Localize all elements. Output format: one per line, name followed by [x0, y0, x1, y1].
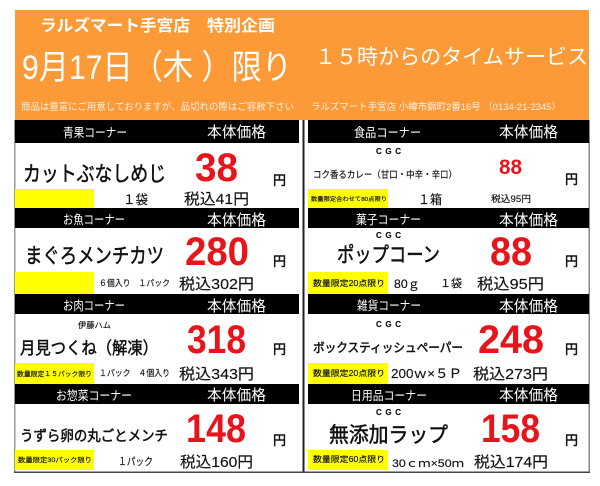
panel: 日用品コーナー: 158: [481, 407, 540, 451]
panel: 雑貨コーナー: 248: [478, 318, 544, 362]
panel: お魚コーナー: まぐろメンチカツ: [25, 245, 164, 268]
panel: お魚コーナー: ６個入り １パック: [99, 278, 170, 288]
panel: 日用品コーナー: 日用品コーナー: [351, 389, 427, 403]
panel: お魚コーナー: 税込302円: [179, 276, 254, 293]
panel: 雑貨コーナー: 数量限定20点限り: [313, 368, 385, 378]
panel: 青果コーナー: 青果コーナー: [63, 126, 127, 140]
panel: 食品コーナー: 円: [565, 172, 578, 187]
panel: 青果コーナー: 円: [273, 173, 286, 188]
panel: 日用品コーナー: 数量限定60点限り: [313, 454, 385, 464]
panel: 食品コーナー: 数量限定合わせて80点限り: [311, 195, 387, 203]
panel: 菓子コーナー: 菓子コーナー: [356, 213, 421, 227]
panel: 菓子コーナー: １袋: [440, 276, 462, 290]
panel: 青果コーナー: 税込41円: [184, 191, 249, 208]
panel: お肉コーナー: 税込343円: [179, 366, 254, 383]
panel: 菓子コーナー: ポップコーン: [337, 244, 440, 267]
panel: 日用品コーナー: 円: [565, 433, 578, 448]
panel: お魚コーナー: [15, 208, 299, 294]
panel: 食品コーナー: [308, 120, 589, 208]
panel: 青果コーナー: 本体価格: [207, 124, 266, 141]
panel: 青果コーナー: [15, 120, 299, 208]
panel: 雑貨コーナー: ボックスティッシュペーパー: [313, 341, 463, 355]
panel: 菓子コーナー: 88: [490, 230, 532, 274]
panel: お肉コーナー: [15, 294, 299, 384]
panel: 日用品コーナー: 30ｃｍ×50ｍ: [392, 458, 464, 470]
store title: ラルズマート手宮店: [40, 16, 190, 35]
panel: 雑貨コーナー: 円: [565, 342, 578, 357]
panel: 雑貨コーナー: 本体価格: [499, 298, 558, 315]
panel: 日用品コーナー: 本体価格: [499, 387, 558, 404]
panel: お惣菜コーナー: 円: [273, 433, 286, 448]
panel: お魚コーナー: お魚コーナー: [63, 213, 125, 227]
panel: お肉コーナー: 伊藤ハム: [78, 320, 111, 330]
panel: 菓子コーナー: 数量限定20点限り: [313, 278, 385, 288]
store title: [40, 16, 275, 35]
panel: 食品コーナー: 食品コーナー: [354, 126, 421, 140]
panel: 食品コーナー: １箱: [418, 192, 442, 207]
panel: 食品コーナー: 本体価格: [499, 124, 558, 141]
panel: 日用品コーナー: CGC: [376, 408, 401, 417]
panel: 青果コーナー: 38: [195, 146, 238, 190]
panel: 食品コーナー: 88: [499, 156, 522, 179]
panel: お惣菜コーナー: 税込160円: [180, 454, 253, 471]
panel: 菓子コーナー: 80ｇ: [394, 277, 420, 291]
panel: 菓子コーナー: 本体価格: [499, 212, 558, 229]
table frame: [14, 120, 590, 473]
panel: 食品コーナー: コク香るカレー（甘口・中辛・辛口）: [313, 169, 457, 181]
panel: お惣菜コーナー: 本体価格: [207, 387, 266, 404]
panel: 日用品コーナー: 無添加ラップ: [329, 424, 448, 447]
panel: 雑貨コーナー: 税込273円: [473, 366, 548, 383]
panel: お惣菜コーナー: 数量限定30パック限り: [18, 455, 92, 464]
panel: お魚コーナー: 280: [185, 230, 249, 274]
panel: お惣菜コーナー: お惣菜コーナー: [56, 388, 132, 403]
panel: お惣菜コーナー: [15, 384, 299, 471]
panel: 雑貨コーナー: 雑貨コーナー: [357, 298, 421, 313]
panel: 菓子コーナー: [308, 208, 589, 294]
panel: 雑貨コーナー: [308, 294, 589, 384]
panel: 日用品コーナー: 税込174円: [474, 454, 548, 471]
panel: 青果コーナー: １袋: [123, 193, 148, 207]
panel: お惣菜コーナー: 148: [186, 407, 246, 451]
time service heading: １５時からのタイムサービス: [315, 46, 588, 69]
panel: 雑貨コーナー: 200ｗ×５Ｐ: [391, 366, 462, 381]
header banner: [15, 10, 589, 120]
panel: 雑貨コーナー: CGC: [376, 320, 401, 329]
date heading: 9月17日（木 ）限り: [22, 49, 292, 87]
panel: お肉コーナー: １パック ４個入り: [99, 368, 170, 378]
panel: お肉コーナー: 本体価格: [207, 298, 266, 315]
panel: お惣菜コーナー: １パック: [118, 456, 153, 468]
store address: ラルズマート手宮店 小樽市錦町2番16号 （0134-21-2345）: [311, 101, 561, 113]
panel: 菓子コーナー: 円: [565, 254, 578, 269]
panel: お魚コーナー: 円: [273, 254, 286, 269]
panel: お肉コーナー: お肉コーナー: [63, 299, 125, 313]
panel: お肉コーナー: 318: [187, 318, 246, 362]
store title: 特別企画: [207, 16, 275, 35]
panel: 食品コーナー: CGC: [376, 147, 401, 156]
panel: 菓子コーナー: 税込95円: [477, 276, 544, 293]
panel: お肉コーナー: 円: [273, 342, 286, 357]
panel: お肉コーナー: 数量限定１５パック限り: [17, 369, 92, 378]
panel: 菓子コーナー: CGC: [376, 231, 401, 240]
panel: 青果コーナー: カットぶなしめじ: [23, 163, 166, 186]
panel: お惣菜コーナー: うずら卵の丸ごとメンチ: [20, 428, 168, 445]
stock notice: 商品は豊富にご用意しておりますが、品切れの際はご容赦下さい: [21, 101, 294, 113]
panel: お魚コーナー: 本体価格: [207, 212, 266, 229]
panel: 日用品コーナー: [308, 384, 589, 471]
panel: お肉コーナー: 月見つくね（解凍）: [20, 339, 158, 358]
panel: 食品コーナー: 税込95円: [491, 193, 531, 204]
